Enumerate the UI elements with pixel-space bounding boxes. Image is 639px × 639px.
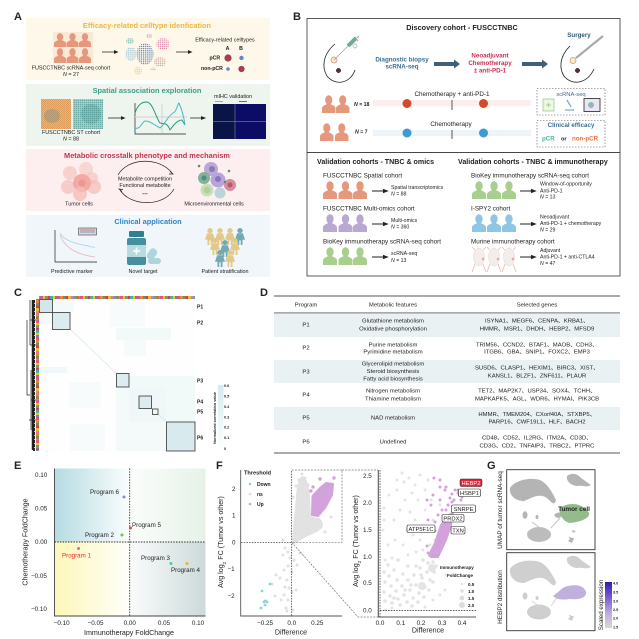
icon: surgery [561,36,603,82]
row P3: SUSD6、CLASP1、HEXIM1、BIRC3、XIST、 [475,366,599,372]
mIHC validation images [213,94,266,139]
gene label TXN [451,526,465,534]
cohort: I-SPY2: Neoadjuvant [540,214,570,220]
ticks [228,486,324,627]
zero lines [54,468,206,616]
ticks: 1.0 [363,554,372,561]
row P3: KANSL1、BLZF1、ZNF611、PLAUR [488,374,586,380]
label: novel target: Novel target [128,269,158,275]
step: neoadjuvant: Neoadjuvant [471,52,509,60]
mIHC validation images: mIHC validation [214,94,252,100]
box: clinical efficacy: pCR [542,136,555,142]
cohort: I-SPY2: I-SPY2 cohort [471,206,510,212]
color legend: 0.4 [224,405,230,409]
right scatter: 0.0 [376,620,385,627]
step: neoadjuvant: Chemotherapy [468,60,512,67]
gene label HSBP1: HSBP1 [460,491,479,497]
panel letter B: B [293,11,301,23]
table rules [274,296,620,454]
right scatter: 0.4 [458,620,467,627]
program 5: Program 5 [132,522,161,529]
step: neoadjuvant: ± anti-PD-1 [474,68,507,74]
ticks: 0 [232,540,236,546]
threshold legend: Up [257,502,264,508]
arrow [108,116,124,120]
program 4 [171,562,200,574]
arm: chemotherapy + anti-PD-1 [322,91,531,113]
label: tumor cells: Tumor cells [65,202,93,208]
expression legend: 2.0 [613,616,618,620]
box: scRNA-seq [537,88,605,115]
row P5: NAD metabolism [371,416,415,422]
panel letter C: C [14,287,22,299]
step: diagnostic biopsy: scRNA-seq [385,64,419,70]
row P6: P6 [302,440,310,446]
label: predictive marker: Predictive marker [51,269,93,275]
program labels: P5 [197,410,203,416]
size legend: 2.0 [468,603,475,608]
panel letter E: E [14,460,21,472]
label: patient stratification: Patient stratification [201,269,249,275]
gray clusters [510,474,591,543]
gene label HSBP1 [458,489,480,497]
right scatter: 0.3 [438,620,447,627]
cohort: BioKey immunotherapy: Window-of-opportunity [540,182,592,188]
patients [322,95,350,113]
row P1: HMMR、MSR1、DHDH、HEBP2、MFSD9 [480,326,594,332]
dendrogram [27,300,36,451]
panel C: correlation heatmap [14,287,230,451]
cohort label [32,66,111,78]
row P1 [302,318,594,332]
row P2: TRIM56、CCND2、BTAF1、MAOB、CDH3、 [476,342,598,348]
HEBP2 expression cluster [553,585,586,600]
panel letter F: F [216,460,223,472]
gene label ATP5F1C: ATP5F1C [408,527,434,533]
purple points [311,478,334,516]
expression legend: 3.5 [613,590,618,594]
arrow [176,50,192,54]
y label: UMAP: UMAP of tumor scRNA-seq [497,471,504,549]
right scatter [352,470,482,634]
panel letter G: G [487,460,496,472]
y ticks: 0.00 [35,539,48,546]
ticks: −1 [228,566,235,573]
panel G: UMAP [487,460,618,631]
label: microenvironmental cells: Microenvironmental cells [184,202,244,208]
size legend [440,565,475,608]
y ticks: 0.05 [35,506,48,513]
program labels: P4 [197,400,203,406]
panel A: study overview [14,11,270,277]
UMAP tumor cell [507,470,595,550]
gene label SNRPE: SNRPE [454,507,474,513]
cohort: murine: N = 47 [540,261,556,267]
n label: N = 7 [355,130,368,136]
teal points [261,584,270,608]
size legend: 1.5 [468,596,475,601]
panel F: volcano plots [216,460,482,636]
row P2: Pyrimidine metabolism [363,350,423,356]
crosstalk text: Metabolite competition [118,176,172,182]
dot legend: efficacy-related celltypes: non-pCR [201,66,223,72]
panel D: metabolic table [260,287,620,454]
y ticks [31,472,48,613]
cohort: FUSCCTNBC multi-omics: FUSCCTNBC Multi-omics cohort [323,206,415,212]
dot legend: efficacy-related celltypes [195,38,255,72]
program labels: P6 [197,436,203,442]
expression legend [598,579,618,630]
axes [378,470,476,617]
cohort: murine: Adjuvant [540,248,561,254]
gene label HEBP2 [460,479,482,487]
row P2 [302,342,598,356]
threshold legend [244,470,272,508]
n label: N = 18 [354,102,370,108]
expression legend: 3.0 [613,600,618,604]
y label: HEBP2: HEBP2 distribution [497,570,504,624]
row P1: Oxidative phosphorylation [359,326,427,332]
y ticks: −0.05 [31,573,47,580]
dashed zero line [380,470,476,617]
cohort: FUSCCTNBC multi-omics [323,206,418,232]
cohort: murine: Anti-PD-1 + anti-CTLA4 [540,254,595,260]
heading: clinical: Clinical application [114,217,182,226]
program labels: P1 [197,304,203,310]
gene label PRDX2: PRDX2 [443,516,463,522]
x ticks: −0.05 [88,620,104,627]
row P4: P4 [302,392,310,398]
annotation bars [36,296,195,451]
threshold legend: ns [257,492,263,498]
panel E: fold change quadrant chart [14,460,206,637]
axes [241,470,342,616]
program boxes [40,300,195,451]
table bands [274,313,620,430]
expression legend: 4.0 [613,582,618,586]
row P3 [302,362,599,382]
heatmap [39,299,195,451]
program 6 [90,489,126,498]
table header [295,302,557,308]
row P5: PARP16、CWF19L1、HLF、BACH2 [488,420,586,426]
heading: metabolic: Metabolic crosstalk phenotype and mechanism [64,151,230,160]
x label: Difference [275,628,307,636]
right scatter: 0.1 [396,620,406,627]
purple points [427,478,462,557]
step: diagnostic biopsy: Diagnostic biopsy [375,56,429,64]
x ticks: −0.10 [54,620,70,627]
arrow [434,60,460,68]
cohort: murine: Murine immunotherapy cohort [471,238,555,246]
size legend: 1.0 [468,589,475,594]
heading: validation immunotherapy: Validation cohorts - TNBC & immunotherapy [458,158,608,166]
spatial images [41,99,103,129]
panel: spatial association [26,84,270,146]
color legend [213,384,230,451]
cohort: BioKey scRNA-seq: scRNA-seq [391,251,417,257]
cohort: FUSCCTNBC multi-omics: N = 360 [391,224,409,230]
ticks: 0.0 [363,608,372,615]
zoom box [292,470,378,617]
row P2: ITGB6、GBA、SNIP1、FOXC2、EMP3 [484,350,591,356]
heading: spatial: Spatial association exploration [93,86,202,95]
row P6: CD48、CD52、IL2RG、ITM2A、CD3D、 [482,436,592,442]
icon: bottle and pills [127,231,161,265]
gray points [292,476,323,545]
table header: Selected genes [517,302,557,308]
heading: discovery cohort: Discovery cohort - FUSCCTNBC [406,23,518,32]
dashed zero lines [241,471,292,616]
axes [54,468,206,616]
crosstalk text: Functional metabolite [119,183,171,189]
x ticks [54,620,205,627]
cohort: FUSCCTNBC spatial: Spatial transcriptomics [391,185,444,191]
row P3: Glycerolipid metabolism [362,362,424,368]
cohort label: N = 88 [63,136,79,142]
gene label ATP5F1C [407,525,435,533]
table header: Metabolic features [369,302,417,308]
arrow [522,60,548,68]
cohort: I-SPY2: Anti-PD-1 + chemotherapy [540,221,602,227]
box: clinical efficacy: non-pCR [572,136,599,142]
crosstalk text [118,176,172,197]
row P1: ISYNA1、MEGF6、CENPA、KRBA1、 [485,318,589,324]
icon: microenvironmental cells [198,162,236,198]
panel letter D: D [260,287,268,299]
x ticks: 0.00 [124,620,136,627]
divider [307,151,620,154]
cohort: I-SPY2 [471,206,602,234]
row P4: TET2、MAP2K7、USP34、SOX4、TCHH、 [478,388,596,394]
panel: efficacy-related celltype identification [26,18,270,80]
dot legend: efficacy-related celltypes: A [226,46,230,52]
ticks: −2 [228,593,235,600]
program 6: Program 6 [90,489,119,496]
step: diagnostic biopsy [375,56,429,70]
cohort: BioKey scRNA-seq [323,238,441,265]
arm label: Chemotherapy [430,121,472,128]
ticks: 2 [232,486,236,493]
right scatter: 0.2 [417,620,426,627]
arm: chemotherapy [320,121,531,141]
ticks: 2.0 [363,500,372,507]
left scatter [217,470,342,636]
tumor cell cluster [560,504,589,523]
row P5: P5 [302,416,310,422]
expression legend: 2.5 [613,608,618,612]
color legend: 0.6 [224,384,229,388]
cohort label: N = 27 [63,72,79,78]
color legend: 0.1 [224,436,229,440]
icon: stratified patients [205,228,245,267]
box: clinical efficacy: or [561,136,567,142]
icon: biopsy [324,36,359,82]
quadrant backgrounds [54,468,206,616]
dot legend: efficacy-related celltypes: Efficacy-related celltypes [195,38,255,44]
threshold legend: Threshold [244,470,272,476]
ticks: 0.0 [287,620,297,627]
size legend: FoldChange [447,573,473,578]
row P1: P1 [302,322,310,328]
icon: tumor cells [61,162,101,201]
x ticks: 0.05 [158,620,171,627]
gene label TXN: TXN [452,528,464,534]
program 4: Program 4 [171,567,200,574]
expression legend: 1.5 [613,626,618,630]
gene label HEBP2: HEBP2 [461,481,481,487]
tSNE clusters [126,34,170,75]
label: surgery: Surgery [567,32,591,39]
program labels: P3 [197,378,203,384]
color legend: 0 [224,447,226,451]
y label: Avg log2 FC (Tumor vs other) [352,495,362,587]
panel letter A: A [14,11,22,23]
panel: metabolic crosstalk [26,149,270,211]
dot legend: efficacy-related celltypes: pCR [210,56,220,62]
cohort label [42,130,101,142]
color legend: 0.5 [224,394,229,398]
heading: efficacy: Efficacy-related celltype idenfication [83,21,212,30]
ticks: 1 [232,513,236,520]
program 3: Program 3 [141,555,170,562]
ticks: 0.25 [311,620,324,627]
crosstalk arrows [118,161,174,203]
box: clinical efficacy: Clinical efficacy [548,122,595,129]
y label: Avg log2 FC (Tumor vs other) [217,496,228,588]
cohort label: FUSCCTNBC ST cohort [42,130,101,136]
heading: validation omics: Validation cohorts - TNBC & omics [317,158,434,166]
x axis label: Immunotherapy FoldChange [84,629,174,637]
y ticks: 0.10 [35,472,48,479]
cohort: BioKey scRNA-seq: N = 13 [391,258,407,264]
row P4: Thiamine metabolism [365,396,421,402]
cohort: BioKey immunotherapy: Anti-PD-1 [540,188,563,194]
frame [307,18,620,276]
row P3: Steroid biosynthesis [367,369,419,375]
color legend: Normalized correlation value [213,392,217,444]
arm label: Chemotherapy + anti-PD-1 [414,91,490,98]
row P6 [302,436,595,450]
arrow [190,116,205,120]
threshold legend: Down [257,482,271,488]
treatment line [373,99,531,110]
cohort: FUSCCTNBC multi-omics: Multi-omics [391,218,418,224]
cohort: FUSCCTNBC spatial: FUSCCTNBC Spatial cohort [323,172,402,180]
program 1: Program 1 [62,552,91,560]
patients [320,123,348,141]
table header: Program [295,302,317,308]
row P3: P3 [302,370,310,376]
ticks [363,473,372,615]
row P2: P2 [302,346,310,352]
program 3 [141,555,172,565]
cohort: FUSCCTNBC spatial: N = 88 [391,192,407,198]
program 1 [62,547,91,560]
gene label PRDX2 [442,514,464,522]
arrow [102,50,118,54]
dot legend: efficacy-related celltypes: B [239,46,243,52]
row P3: Fatty acid biosynthesis [363,376,423,382]
cohort: BioKey immunotherapy: BioKey immunotherapy scRNA-seq cohort [471,172,589,180]
cohort: BioKey immunotherapy [471,172,592,200]
crosstalk text: --- [142,191,148,197]
row P5 [302,412,596,426]
cohort: murine [471,238,595,272]
row P4: MAPKAPK5、AGL、WDR6、HYMAI、PIK3CB [475,396,599,402]
color legend: 0.2 [224,426,229,430]
row P4 [302,388,599,402]
size legend: 0.5 [468,582,475,587]
row P2: Purine metabolism [369,342,417,348]
row P5: HMMR、TMEM204、CXorf40A、STXBP5、 [478,412,596,418]
y axis label: Chemotherapy FoldChange [22,498,30,586]
cohort: BioKey immunotherapy: N = 13 [540,194,556,200]
treatment line [373,128,531,139]
label: tumor cell: Tumor cell [558,506,590,513]
cohort: BioKey scRNA-seq: BioKey immunotherapy scRNA-seq cohort [323,238,441,246]
ticks: 1.5 [363,527,372,534]
x ticks: 0.10 [192,620,205,627]
program labels: P2 [197,320,203,326]
ticks: −0.25 [257,620,273,627]
cohort label: FUSCCTNBC scRNA-seq cohort [32,66,111,72]
size legend: Immunotherapy [440,565,474,570]
cohort: FUSCCTNBC spatial [323,172,444,199]
step: neoadjuvant [468,52,512,74]
row P6: Undefined [380,440,406,446]
expression legend: Scaled expression [598,579,605,630]
line chart [135,102,187,134]
y ticks: −0.10 [31,606,47,613]
row P6: CD3G、CD2、TNFAIP3、TRBC2、PTPRC [480,444,595,450]
UMAP HEBP2 [507,553,595,631]
cohort: I-SPY2: N = 29 [540,228,556,234]
box: scRNA-seq: scRNA-seq [556,92,586,98]
panel B: cohorts [293,11,620,276]
icon: patient group [53,32,93,63]
row P4: Nitrogen metabolism [366,388,420,394]
gray points [383,473,446,610]
row P1: Glutathione metabolism [362,318,424,324]
ticks: 0.5 [363,580,372,587]
x label: Difference [412,626,444,634]
ticks: 2.5 [363,473,372,480]
box: clinical efficacy [537,120,605,147]
program labels [197,304,203,442]
color legend: 0.3 [224,416,229,420]
program 2: Program 2 [85,532,114,539]
gene label SNRPE [452,505,476,513]
panel: clinical application [26,215,270,277]
survival chart [55,228,97,262]
